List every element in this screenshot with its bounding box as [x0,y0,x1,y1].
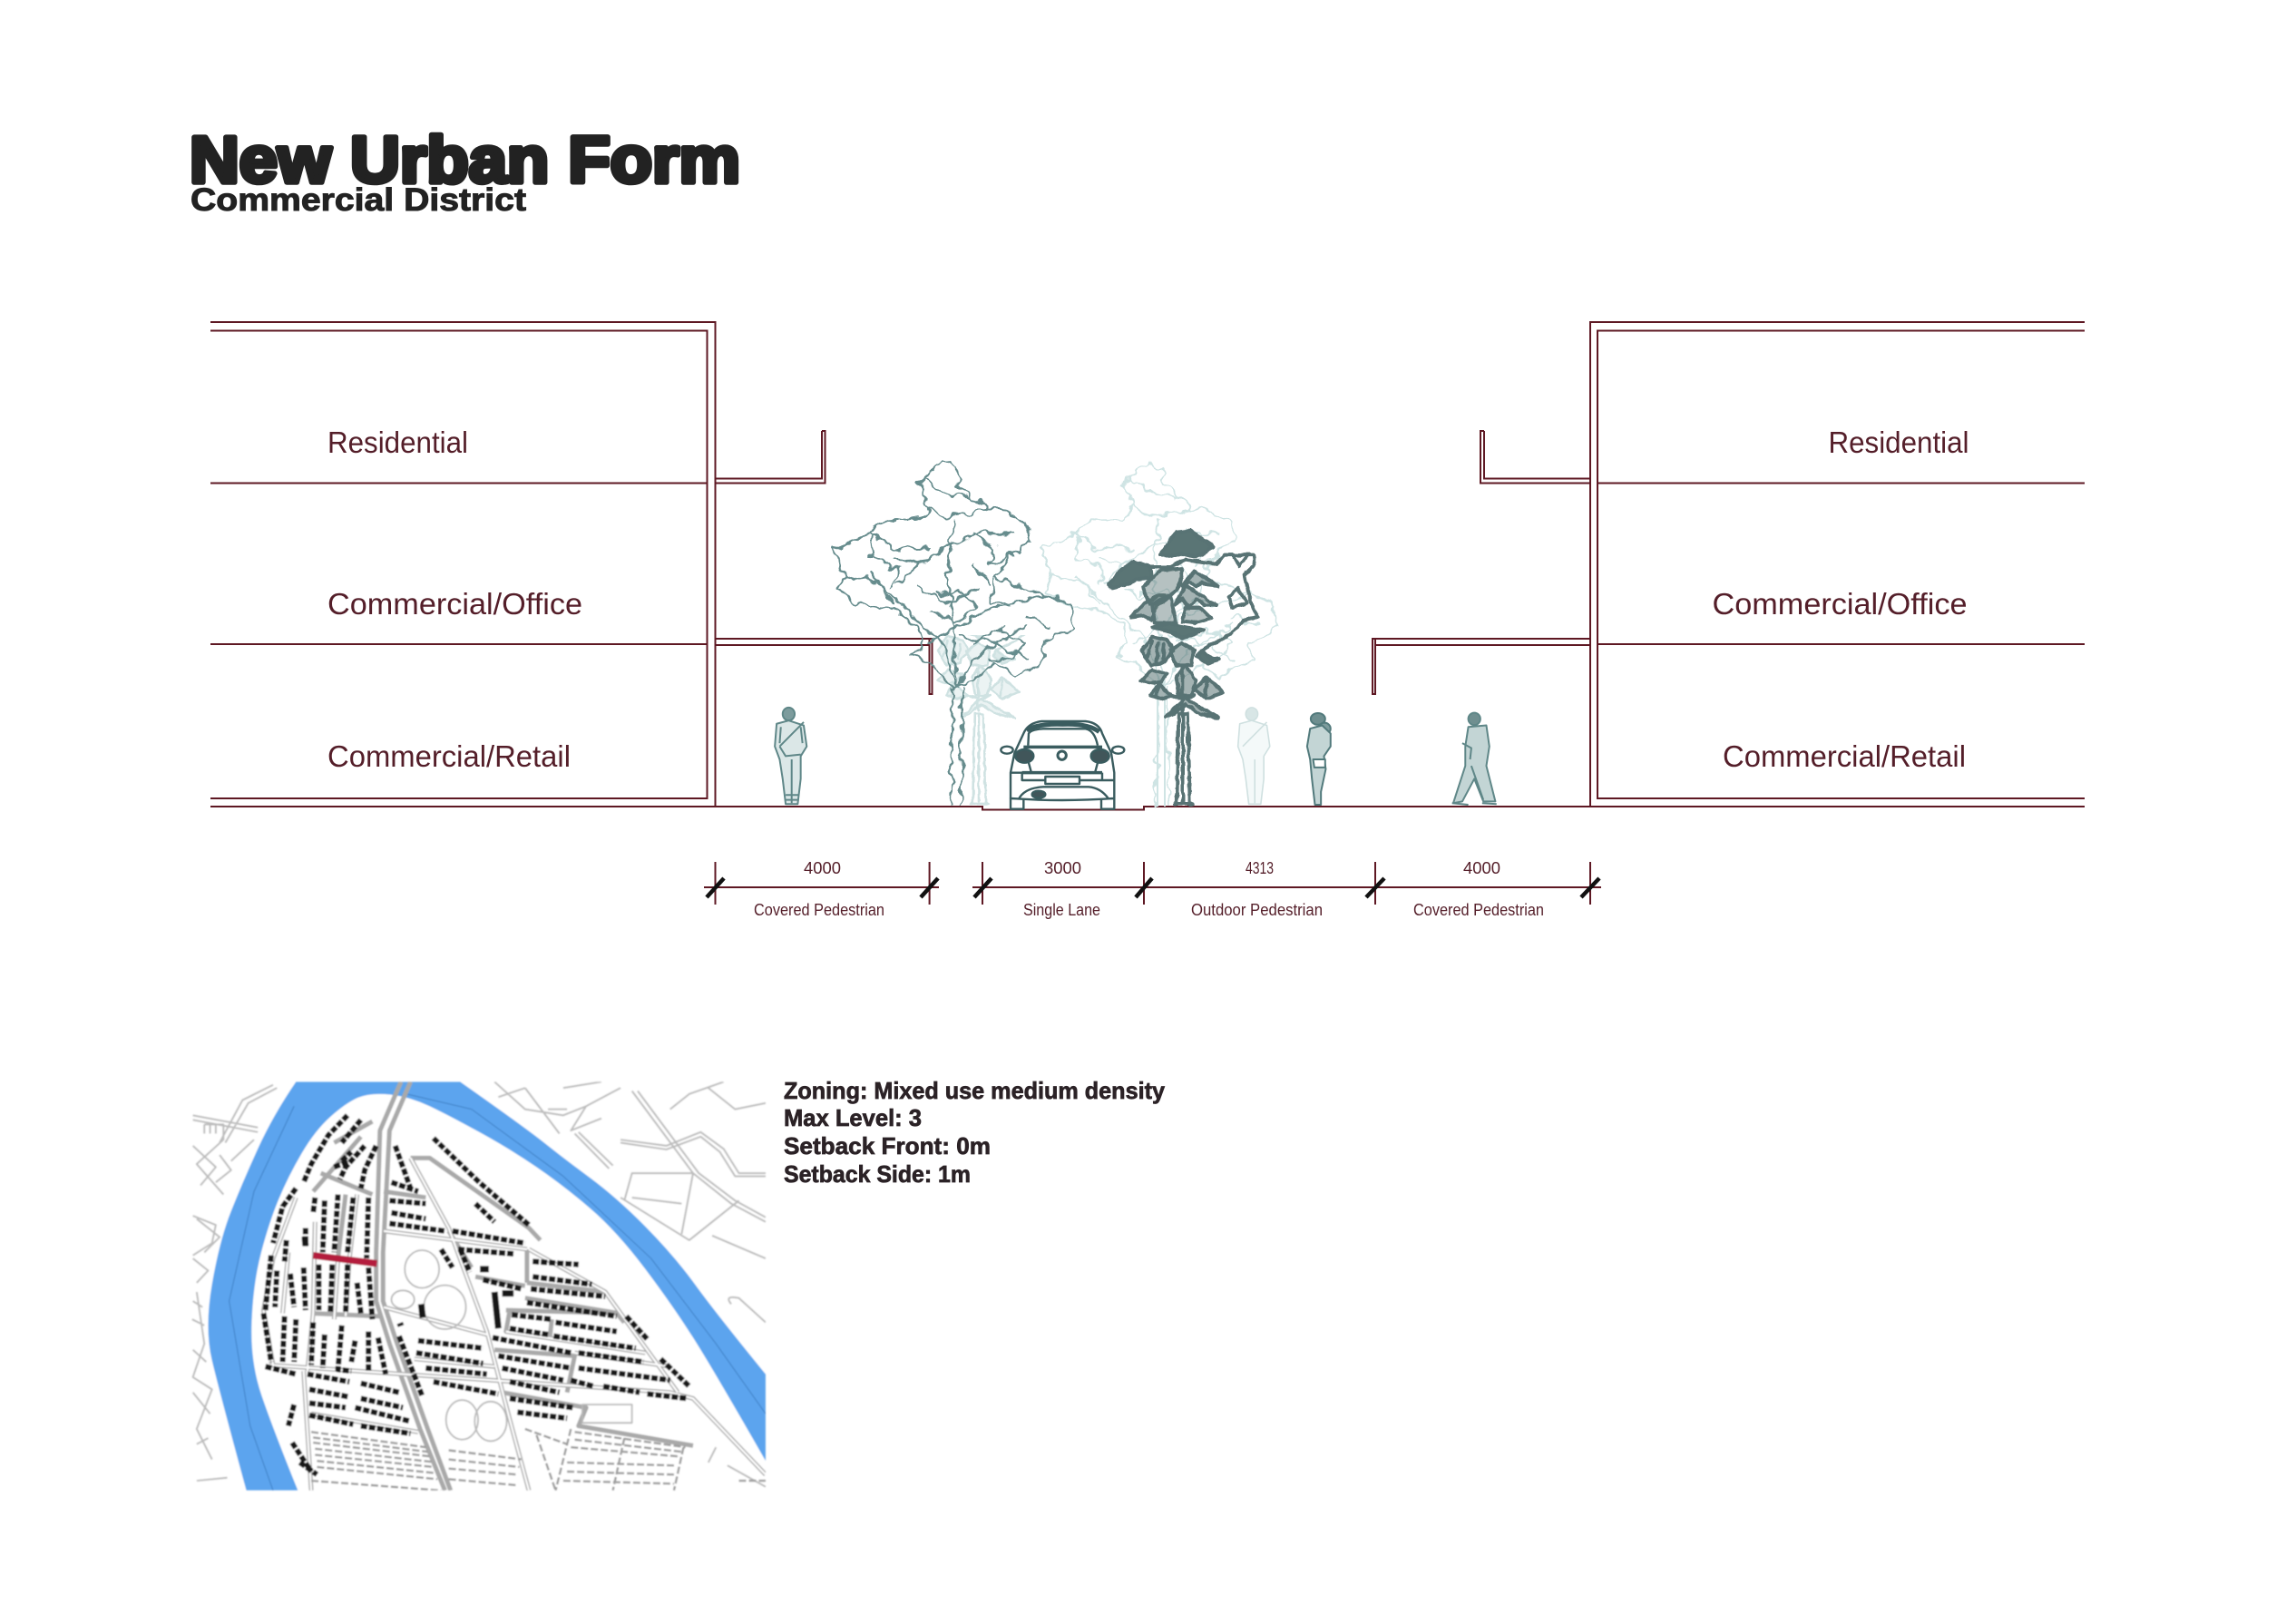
map: main roads [263,1081,766,1491]
person: walking right [1452,713,1497,805]
floor label: office left: Commercial/Office [327,587,582,621]
map: surrounding streets [192,1081,766,1487]
map: building rows [263,1115,689,1474]
left building section [210,322,933,807]
dimension value: 4313: 4313 [1246,859,1274,877]
floor label: office right: Commercial/Office [1713,587,1967,621]
street tree [834,462,1074,806]
pine tree [1109,531,1258,804]
location map [191,1081,766,1491]
zoning info text [784,1077,1166,1188]
map: southern dense streets [311,1429,766,1491]
dimension line: right group [972,862,1601,905]
max level line: Max Level: 3 [784,1104,922,1131]
floor label: residential right: Residential [1829,426,1969,459]
ground line with road dip [210,807,2085,809]
dimension value: 3000: 3000 [1044,859,1081,877]
setback side line: Setback Side: 1m [784,1160,971,1188]
subtitle: Commercial District [191,182,526,218]
person walking left [775,708,806,804]
map: park ovals [391,1250,632,1441]
floor label: residential left: Residential [327,426,468,459]
ghost tree behind pine [1040,462,1280,806]
floor label: retail left: Commercial/Retail [327,739,571,773]
dimension line: left group [704,862,939,905]
ghost pine behind street tree [936,635,1025,806]
map: river [208,1081,766,1491]
person: woman [1307,713,1331,805]
right building section [1373,322,2085,807]
map: red street marker [313,1256,377,1264]
map: road fill [263,1158,766,1491]
dimension value: 4000: 4000 [1463,859,1500,877]
floor label: retail right: Commercial/Retail [1723,739,1966,773]
title: New Urban Form [190,124,740,197]
map: large building blocks [305,1237,513,1328]
dimension label: covered pedestrian: Covered Pedestrian [1413,901,1544,919]
ghost person [1238,708,1270,804]
car rear view [1001,721,1124,809]
dimension label: covered pedestrian: Covered Pedestrian [754,901,884,919]
map: river channel line [230,1094,766,1491]
dimension label: single lane: Single Lane [1023,901,1100,919]
setback front line: Setback Front: 0m [784,1132,991,1159]
zoning line: Zoning: Mixed use medium density [784,1077,1166,1104]
ghost tree trunk [1158,699,1165,807]
dimension label: outdoor pedestrian: Outdoor Pedestrian [1191,901,1323,919]
dimension value: 4000: 4000 [804,859,841,877]
